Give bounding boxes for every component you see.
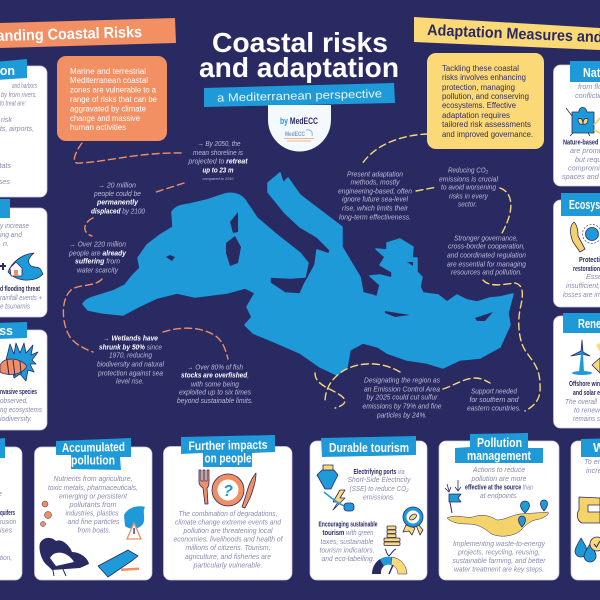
map note: water scarcity: → Over 220 million bbox=[69, 240, 126, 248]
map note: overfished stocks bbox=[177, 362, 253, 405]
heading: further impacts on people: Further impacts bbox=[188, 438, 268, 453]
panel: renewables bbox=[554, 313, 600, 428]
intro box: adaptation: risks involves enhancing bbox=[442, 73, 526, 82]
panel: pollution management bbox=[439, 433, 559, 580]
map note: wetlands bbox=[97, 334, 164, 386]
panel: storm flooding: n. bbox=[3, 239, 9, 248]
intro box: risks: Marine and terrestrial bbox=[70, 67, 146, 76]
title: Coastal risks bbox=[212, 27, 388, 58]
panel: pollution management: sustainable farming, and better bbox=[452, 556, 546, 565]
panel: biodiversity loss: ng ecosystems bbox=[0, 405, 42, 414]
map note: emission control area: Designating the region as bbox=[364, 376, 440, 384]
intro box: adaptation: adaptation requires bbox=[442, 111, 510, 120]
panel: further impacts on people: climate change extreme events and bbox=[175, 518, 282, 526]
panel: pollution management: water treatment are key steps. bbox=[454, 564, 544, 574]
map note: water scarcity: people are already bbox=[68, 248, 127, 258]
panel: accumulated pollution: industries, plastics bbox=[66, 508, 119, 518]
panel: biodiversity loss: observed, bbox=[0, 396, 28, 405]
map note: governance: are essential for managing bbox=[447, 260, 526, 268]
heading: accumulated pollution: pollution bbox=[71, 454, 115, 468]
heading: pollution management bbox=[455, 433, 543, 463]
panel: durable tourism: Encouraging sustainable bbox=[318, 520, 378, 528]
panel: nature-based solutions bbox=[554, 61, 600, 186]
map note: governance: and coordinated regulation bbox=[447, 250, 526, 260]
map note: wetlands: level rise. bbox=[116, 376, 144, 386]
map note: present adaptation bbox=[338, 170, 412, 222]
map note: support needed: Support needed bbox=[471, 386, 518, 396]
map note: displaced people: → 20 million bbox=[98, 180, 136, 190]
panel: pollution management: effective at the source than bbox=[465, 482, 533, 492]
heading: durable tourism: Durable tourism bbox=[329, 441, 409, 455]
panel: further impacts on people: millions of citizens. Tourism, bbox=[186, 543, 270, 552]
panel: further impacts on people: The combination of degradations, bbox=[178, 509, 278, 518]
panel: storm flooding bbox=[0, 199, 47, 317]
map note: support needed bbox=[467, 386, 521, 412]
badge: by MedECC: MedECC bbox=[285, 131, 305, 138]
map note: shoreline retreat: compared to 2010 bbox=[202, 177, 234, 181]
panel: inundation: ts, airports, bbox=[0, 124, 34, 133]
panel: durable tourism: tourism with green bbox=[322, 528, 374, 537]
map note: shoreline retreat: up to 23 m bbox=[202, 166, 234, 174]
icon: fork, plate and knife: ? bbox=[223, 483, 233, 500]
panel: further impacts on people bbox=[164, 435, 292, 580]
icon: lionfish bbox=[0, 343, 38, 381]
panel: inundation bbox=[0, 59, 47, 197]
icon: hand and globe bbox=[570, 222, 600, 252]
heading: further impacts on people bbox=[181, 435, 275, 467]
icon: yellow hand bbox=[577, 497, 600, 523]
heading: further impacts on people: on people bbox=[204, 452, 252, 466]
map note: overfished stocks: → Over 80% of fish bbox=[187, 362, 243, 372]
map note: wetlands: biodiversity and natural bbox=[97, 360, 164, 368]
icon: polluted spill with pins bbox=[445, 480, 548, 536]
map note: emission control area: an Emission Control Area bbox=[364, 384, 440, 394]
map note: present adaptation: rise, which limits their bbox=[342, 204, 409, 212]
intro box: adaptation: protection, managing bbox=[442, 83, 515, 92]
panel: water resources: rusion bbox=[0, 517, 16, 526]
map note: shoreline retreat: mean shoreline is bbox=[193, 148, 243, 157]
map note: emission control area: particles by 24%. bbox=[376, 410, 427, 420]
map note: water scarcity: water scarcity bbox=[77, 266, 118, 274]
map: Mediterranean Sea bbox=[83, 173, 513, 375]
panel: durable tourism: (SSE) to reduce CO₂ bbox=[350, 484, 409, 493]
panel: accumulated pollution: toxic metals, pharmaceuticals, bbox=[48, 483, 138, 492]
map note: reducing CO2: to avoid worsening bbox=[441, 182, 496, 192]
map note: emission control area: by 2025 could cut sulfur bbox=[366, 392, 438, 402]
intro box: adaptation: and improved governance. bbox=[442, 130, 533, 139]
heading: pollution management: management bbox=[467, 449, 532, 463]
title: and adaptation bbox=[199, 52, 399, 83]
panel: inundation: by from rivers. bbox=[1, 90, 37, 99]
badge: by MedECC bbox=[268, 105, 331, 152]
map note: governance: Stronger governance, bbox=[454, 234, 518, 242]
icon: fork, plate and knife bbox=[199, 470, 256, 508]
dashed connectors: yellow bbox=[315, 134, 540, 411]
panel: durable tourism: Electrifying ports via bbox=[354, 467, 405, 476]
map note: displaced people: people could be bbox=[93, 189, 141, 198]
panel: storm flooding: rainfall events + bbox=[0, 293, 42, 302]
intro box: adaptation: ecosystems. Effective bbox=[442, 101, 516, 110]
map note: wetlands: shrunk by 50% since bbox=[99, 342, 162, 352]
panel: accumulated pollution bbox=[34, 438, 152, 580]
heading: accumulated pollution bbox=[56, 438, 131, 470]
intro box: adaptation: tailored risk assessments bbox=[442, 120, 531, 129]
intro box: risks: Mediterranean coastal bbox=[70, 76, 148, 85]
icon: puzzle piece bbox=[566, 107, 600, 136]
map note: overfished stocks: exploited up to six times bbox=[179, 388, 251, 396]
panel: water management bbox=[571, 438, 600, 580]
panel: further impacts on people: particularly vulnerable. bbox=[193, 560, 262, 570]
icon: water drops and clock bbox=[575, 537, 600, 562]
intro box: risks: zones are vulnerable to a bbox=[70, 86, 157, 94]
map note: governance: resources and pollution. bbox=[451, 268, 522, 276]
badge: by MedECC: by MedECC bbox=[280, 116, 318, 127]
heading: durable tourism bbox=[321, 436, 416, 457]
map note: reducing CO2: risks in every bbox=[449, 192, 488, 200]
subtitle banner: a Mediterranean perspective bbox=[217, 88, 382, 105]
icon: gauge bbox=[372, 549, 407, 574]
icon: dark cloud bbox=[39, 538, 89, 576]
panel: ecosystem bbox=[554, 193, 600, 307]
map note: shoreline retreat: → By 2050, the bbox=[198, 139, 240, 148]
map note: water scarcity bbox=[68, 240, 127, 274]
title bbox=[199, 27, 399, 83]
map note: overfished stocks: stocks are overfished, bbox=[181, 370, 249, 380]
icon: eco-label rosette bbox=[403, 507, 423, 535]
panel: storm flooding: d flooding threat bbox=[0, 284, 40, 293]
panel: durable tourism: emissions. bbox=[363, 492, 395, 502]
icon: smoke and warning triangle bbox=[124, 506, 145, 539]
panel: durable tourism: tourism indicators, bbox=[320, 546, 374, 554]
map note: displaced people bbox=[91, 180, 145, 216]
map note: wetlands: 1970, reducing bbox=[109, 350, 152, 360]
map note: displaced people: displaced by 2100 bbox=[91, 206, 145, 216]
panel: further impacts on people: pollution are threatening local bbox=[183, 526, 273, 535]
map note: present adaptation: long-term effectiveness. bbox=[339, 212, 411, 222]
map note: emission control area: emissions by 79% and fine bbox=[362, 402, 442, 410]
map note: wetlands: → Wetlands have bbox=[103, 334, 158, 342]
panel: accumulated pollution: from boats. bbox=[78, 526, 111, 534]
icon: wind turbine and solar panels bbox=[571, 340, 600, 375]
map note: emission control area bbox=[362, 376, 442, 420]
intro box: risks bbox=[57, 56, 167, 141]
map note: present adaptation: engineering-based, often bbox=[338, 186, 412, 196]
panel: accumulated pollution: Nutrients from agriculture, bbox=[54, 474, 132, 483]
panel: biodiversity loss: iodiversity. bbox=[0, 414, 32, 423]
panel: inundation: to treat are: bbox=[0, 98, 26, 108]
map note: reducing CO2 bbox=[439, 166, 498, 208]
panel: accumulated pollution: pollutants from bbox=[69, 500, 117, 509]
map note: present adaptation: Present adaptation bbox=[347, 170, 403, 178]
panel: pollution management: Actions to reduce bbox=[472, 465, 525, 474]
intro box: risks: range of risks that can be bbox=[70, 95, 157, 104]
panel: accumulated pollution: emerging or persistent bbox=[59, 492, 128, 500]
map note: overfished stocks: with some being bbox=[191, 380, 239, 388]
panel: pollution management: at endpoints. bbox=[480, 491, 518, 500]
dashed connectors: orange bbox=[63, 143, 228, 359]
panel: renewables: The overall bbox=[565, 397, 597, 406]
panel: biodiversity loss: nvasive species bbox=[0, 387, 37, 396]
map note: governance bbox=[447, 234, 526, 276]
panel: biodiversity loss bbox=[0, 322, 47, 430]
icon: electric ship and plug bbox=[317, 465, 354, 511]
panel: water resources: ises bbox=[0, 526, 12, 534]
map note: shoreline retreat: projected to retreat bbox=[188, 156, 248, 166]
map note: support needed: for southern and bbox=[470, 395, 519, 404]
panel: accumulated pollution: and fine particles bbox=[68, 517, 120, 526]
icon: plastic bottle bbox=[98, 550, 139, 577]
intro box: adaptation bbox=[427, 53, 544, 149]
panel: nature-based solutions: are promi bbox=[570, 146, 600, 155]
icon: pollution particles bbox=[40, 501, 52, 526]
panel: water resources: quifers bbox=[0, 508, 15, 517]
panel: water resources: tion, bbox=[0, 553, 12, 562]
panel: inundation: risk bbox=[1, 115, 12, 124]
panel: further impacts on people: agriculture, and fisheries are bbox=[185, 552, 271, 561]
panel: storm flooding: y increase bbox=[0, 221, 29, 230]
map note: support needed: eastern countries. bbox=[467, 404, 521, 412]
panel: water resources bbox=[0, 438, 22, 580]
panel: storm flooding: e tsunamis bbox=[0, 302, 30, 310]
intro box: adaptation: Tackling these coastal bbox=[442, 64, 519, 73]
map note: governance: cross-border cooperation, bbox=[448, 242, 525, 250]
intro box: adaptation: pollution, and conserving bbox=[442, 92, 529, 101]
panel: durable tourism: taxes, sustainable bbox=[320, 537, 374, 546]
intro box: risks: aggravated by climate bbox=[70, 104, 146, 114]
map note: present adaptation: methods, mostly bbox=[350, 178, 400, 186]
map note: reducing CO2: Reducing CO₂ bbox=[448, 166, 488, 174]
map note: displaced people: permanently bbox=[96, 198, 139, 206]
intro box: risks: change and massive bbox=[70, 114, 140, 123]
map note: shoreline retreat bbox=[188, 139, 248, 181]
panel: durable tourism: and eco-labelling. bbox=[322, 554, 375, 563]
panel: durable tourism: Short-Side Electricity bbox=[348, 475, 411, 484]
heading: accumulated pollution: Accumulated bbox=[62, 440, 125, 455]
map note: overfished stocks: beyond sustainable limits. bbox=[177, 396, 253, 405]
map note: reducing CO2: sector. bbox=[458, 200, 477, 208]
subtitle banner bbox=[204, 83, 395, 107]
panel: pollution management: pollution are more bbox=[471, 474, 526, 483]
map note: present adaptation: ignore future sea-level bbox=[342, 194, 408, 204]
panel: pollution management: projects, recycling, reusing, bbox=[457, 548, 540, 556]
heading banner: understanding coastal risks bbox=[0, 18, 176, 48]
panel: storm flooding: ing and bbox=[0, 230, 23, 239]
panel: pollution management: Implementing waste-to-energy bbox=[453, 539, 545, 548]
map note: reducing CO2: emissions is crucial bbox=[439, 174, 498, 184]
icon: flood wave and house bbox=[0, 253, 43, 280]
icon: coins bbox=[384, 526, 400, 546]
intro box: risks: human activities bbox=[70, 123, 126, 132]
map note: wetlands: protection against sea bbox=[97, 368, 163, 378]
panel: further impacts on people: economies, livelihoods and health of bbox=[174, 534, 283, 544]
heading: pollution management: Pollution bbox=[477, 436, 522, 450]
panel: inundation: and harbors bbox=[12, 81, 37, 90]
panel: durable tourism bbox=[310, 436, 427, 580]
map note: water scarcity: suffering from bbox=[75, 256, 120, 266]
